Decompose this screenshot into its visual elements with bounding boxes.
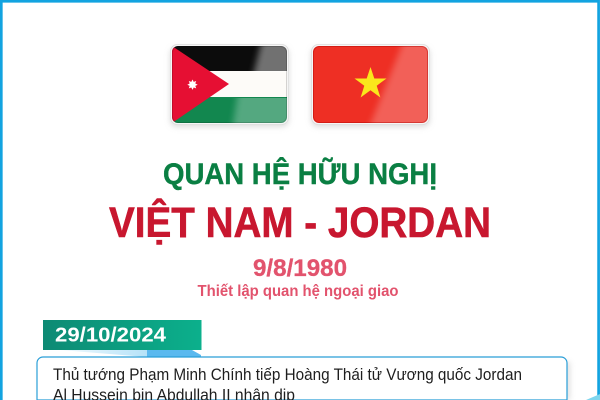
establishment caption: Thiết lập quan hệ ngoại giao: [198, 283, 398, 300]
date ribbon: 29/10/2024: [55, 324, 167, 346]
event card: [37, 357, 570, 400]
heading: friendship relations: QUAN HỆ HỮU NGHỊ: [163, 157, 437, 191]
ribbon fold under date: [60, 350, 201, 358]
establishment date: 9/8/1980: [253, 255, 347, 282]
corner accent: [586, 394, 600, 400]
event card: Thủ tướng Phạm Minh Chính tiếp Hoàng Thái tử Vương quốc Jordan: [53, 366, 522, 384]
icon: Jordan flag: [168, 44, 291, 129]
heading: Vietnam - Jordan: VIỆT NAM - JORDAN: [109, 198, 491, 247]
icon: Vietnam flag: [311, 40, 440, 130]
date ribbon: [43, 320, 202, 350]
